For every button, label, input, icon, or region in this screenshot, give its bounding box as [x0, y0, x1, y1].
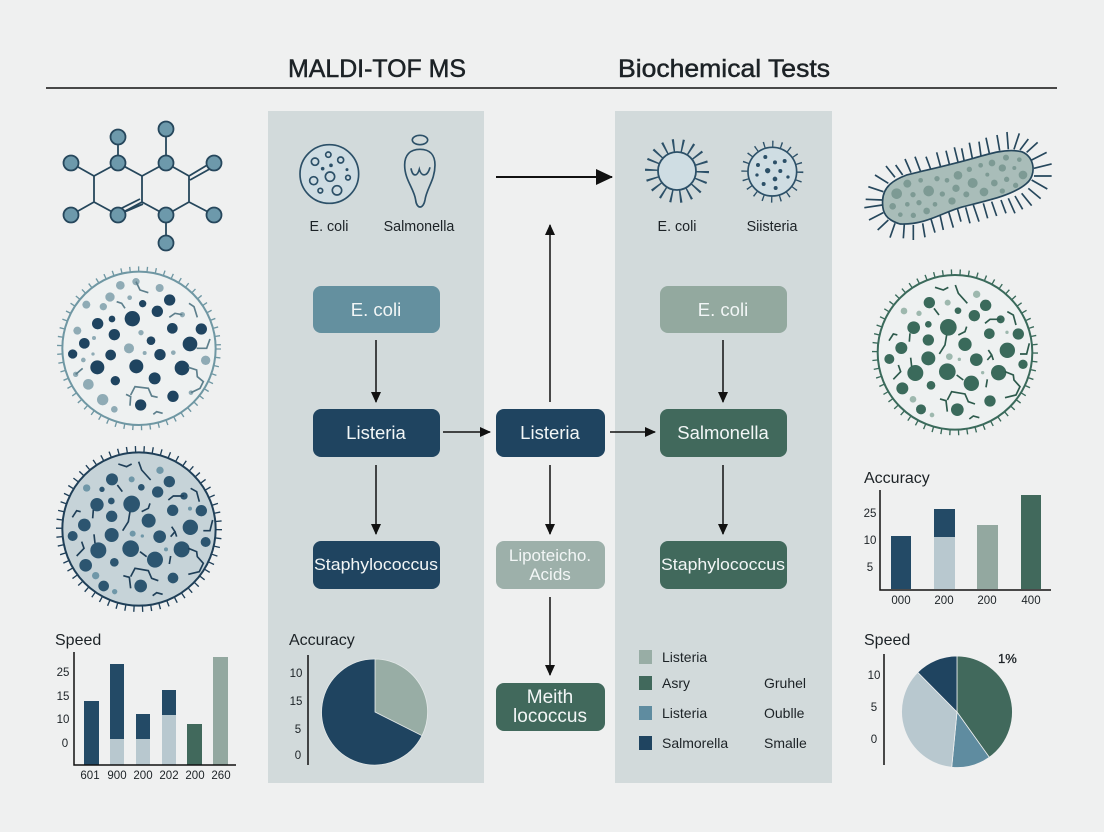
arrow: middle Listeria to Salmonella [610, 431, 655, 433]
arrow: E. coli to Salmonella (right) [722, 340, 724, 402]
legend: Asry [662, 675, 690, 691]
chart: Accuracy pie chart (left panel): 5 [295, 724, 301, 736]
box: Listeria (left): Listeria [346, 422, 407, 443]
icon: rod bacterium [864, 132, 1052, 240]
box: Lipoteicho Acids [496, 541, 605, 589]
box: Meith lococcus [496, 683, 605, 731]
arrow: middle Listeria to Lipoteicho [549, 465, 551, 534]
icon: green cell [875, 272, 1035, 432]
icon: spiked circle (right panel) [652, 146, 702, 196]
chart: Speed bar chart (left): 200 [133, 770, 153, 782]
box: Staphylococcus (right) [660, 541, 787, 589]
chart: Speed bar chart (left): 260 [211, 770, 231, 782]
label: Siisteria: Siisteria [747, 219, 797, 235]
box: Listeria (middle): Listeria [520, 422, 581, 443]
icon: blue filled cell [59, 449, 219, 609]
legend: Smalle [764, 735, 807, 751]
chart: Accuracy bar chart (right): 000 [891, 595, 911, 607]
chart: Speed bar chart (left): 601 [80, 770, 100, 782]
chart: Accuracy bar chart (right): 200 [977, 595, 997, 607]
box: Meith lococcus: lococcus [513, 706, 587, 727]
label: E. coli (right): E. coli [658, 219, 696, 235]
icon: E. coli outline (left panel) [300, 145, 359, 203]
chart: Accuracy bar chart (right): 25 [864, 508, 876, 520]
chart: Accuracy pie chart (left panel) [289, 632, 428, 765]
chart: Speed bar chart (left): 25 [57, 667, 69, 679]
box: Lipoteicho Acids: Lipoteicho. [509, 546, 591, 565]
chart: Speed bar chart (left): 202 [159, 770, 179, 782]
chart: Speed pie chart (right): 0 [871, 734, 877, 746]
chart: Speed pie chart (right): 5 [871, 702, 877, 714]
chart: Accuracy pie chart (left panel): 15 [290, 696, 302, 708]
chart: Speed pie chart (right) [864, 632, 1017, 768]
arrow: top horizontal [496, 176, 612, 178]
box: Salmonella [660, 409, 787, 457]
chart: Speed bar chart (left): 10 [57, 714, 69, 726]
box: Staphylococcus (left) [313, 541, 440, 589]
chart: Speed bar chart (left): 15 [57, 691, 69, 703]
legend: Listeria [662, 705, 707, 721]
chart: Speed bar chart (left): Speed [55, 632, 101, 649]
arrow: Lipoteicho to Meith [549, 597, 551, 675]
arrow: E. coli to Listeria (left) [375, 340, 377, 402]
legend: Listeria [662, 649, 707, 665]
arrow: Salmonella to Staphylococcus (right) [722, 465, 724, 534]
arrow: Listeria to middle Listeria [443, 431, 490, 433]
panel: Biochemical Tests [615, 111, 832, 783]
legend: Gruhel [764, 675, 806, 691]
chart: Accuracy bar chart (right): Accuracy [864, 470, 930, 487]
arrow: up from middle Listeria [549, 225, 551, 402]
box: Meith lococcus: Meith [527, 687, 573, 708]
chart: Speed pie chart (right): Speed [864, 632, 910, 649]
chart: Speed pie chart (right): 10 [868, 670, 880, 682]
legend: Oublle [764, 705, 805, 721]
label: Salmonella: Salmonella [384, 219, 454, 235]
chart: Accuracy bar chart (right): 5 [867, 562, 873, 574]
box: Staphylococcus (right): Staphylococcus [661, 555, 785, 574]
chart: Accuracy pie chart (left panel): Accuracy [289, 632, 355, 649]
chart: Speed bar chart (left): 200 [185, 770, 205, 782]
arrow: Listeria to Staphylococcus (left) [375, 465, 377, 534]
box: E. coli (right): E. coli [698, 299, 748, 320]
box: Listeria (left) [313, 409, 440, 457]
icon: molecule [64, 122, 222, 250]
box: E. coli (left): E. coli [351, 299, 401, 320]
chart: Accuracy bar chart (right) [864, 470, 1051, 607]
box: Listeria (middle) [496, 409, 605, 457]
chart: Accuracy pie chart (left panel): 10 [290, 668, 302, 680]
chart: Accuracy bar chart (right): 200 [934, 595, 954, 607]
legend [639, 649, 807, 751]
box: E. coli (right) [660, 286, 787, 333]
box: E. coli (left) [313, 286, 440, 333]
chart: Accuracy pie chart (left panel): 0 [295, 750, 301, 762]
icon: Salmonella outline [405, 135, 435, 207]
label: E. coli (left): E. coli [310, 219, 348, 235]
title: Biochemical Tests: Biochemical Tests [618, 55, 830, 83]
panel: MALDI-TOF MS [268, 111, 484, 783]
chart: Speed pie chart (right): 1% [998, 651, 1017, 666]
chart: Accuracy bar chart (right): 400 [1021, 595, 1041, 607]
box: Lipoteicho Acids: Acids [529, 565, 571, 584]
chart: Speed bar chart (left): 0 [62, 738, 68, 750]
title: MALDI-TOF MS: MALDI-TOF MS [288, 55, 466, 83]
icon: spiked dotted circle [745, 144, 800, 199]
legend: Salmorella [662, 735, 728, 751]
icon: light cell with dark particles [60, 269, 218, 428]
chart: Accuracy bar chart (right): 10 [864, 535, 876, 547]
chart: Speed bar chart (left): 900 [107, 770, 127, 782]
box: Staphylococcus (left): Staphylococcus [314, 555, 438, 574]
chart: Speed bar chart (left) [55, 632, 236, 782]
box: Salmonella: Salmonella [677, 422, 769, 443]
